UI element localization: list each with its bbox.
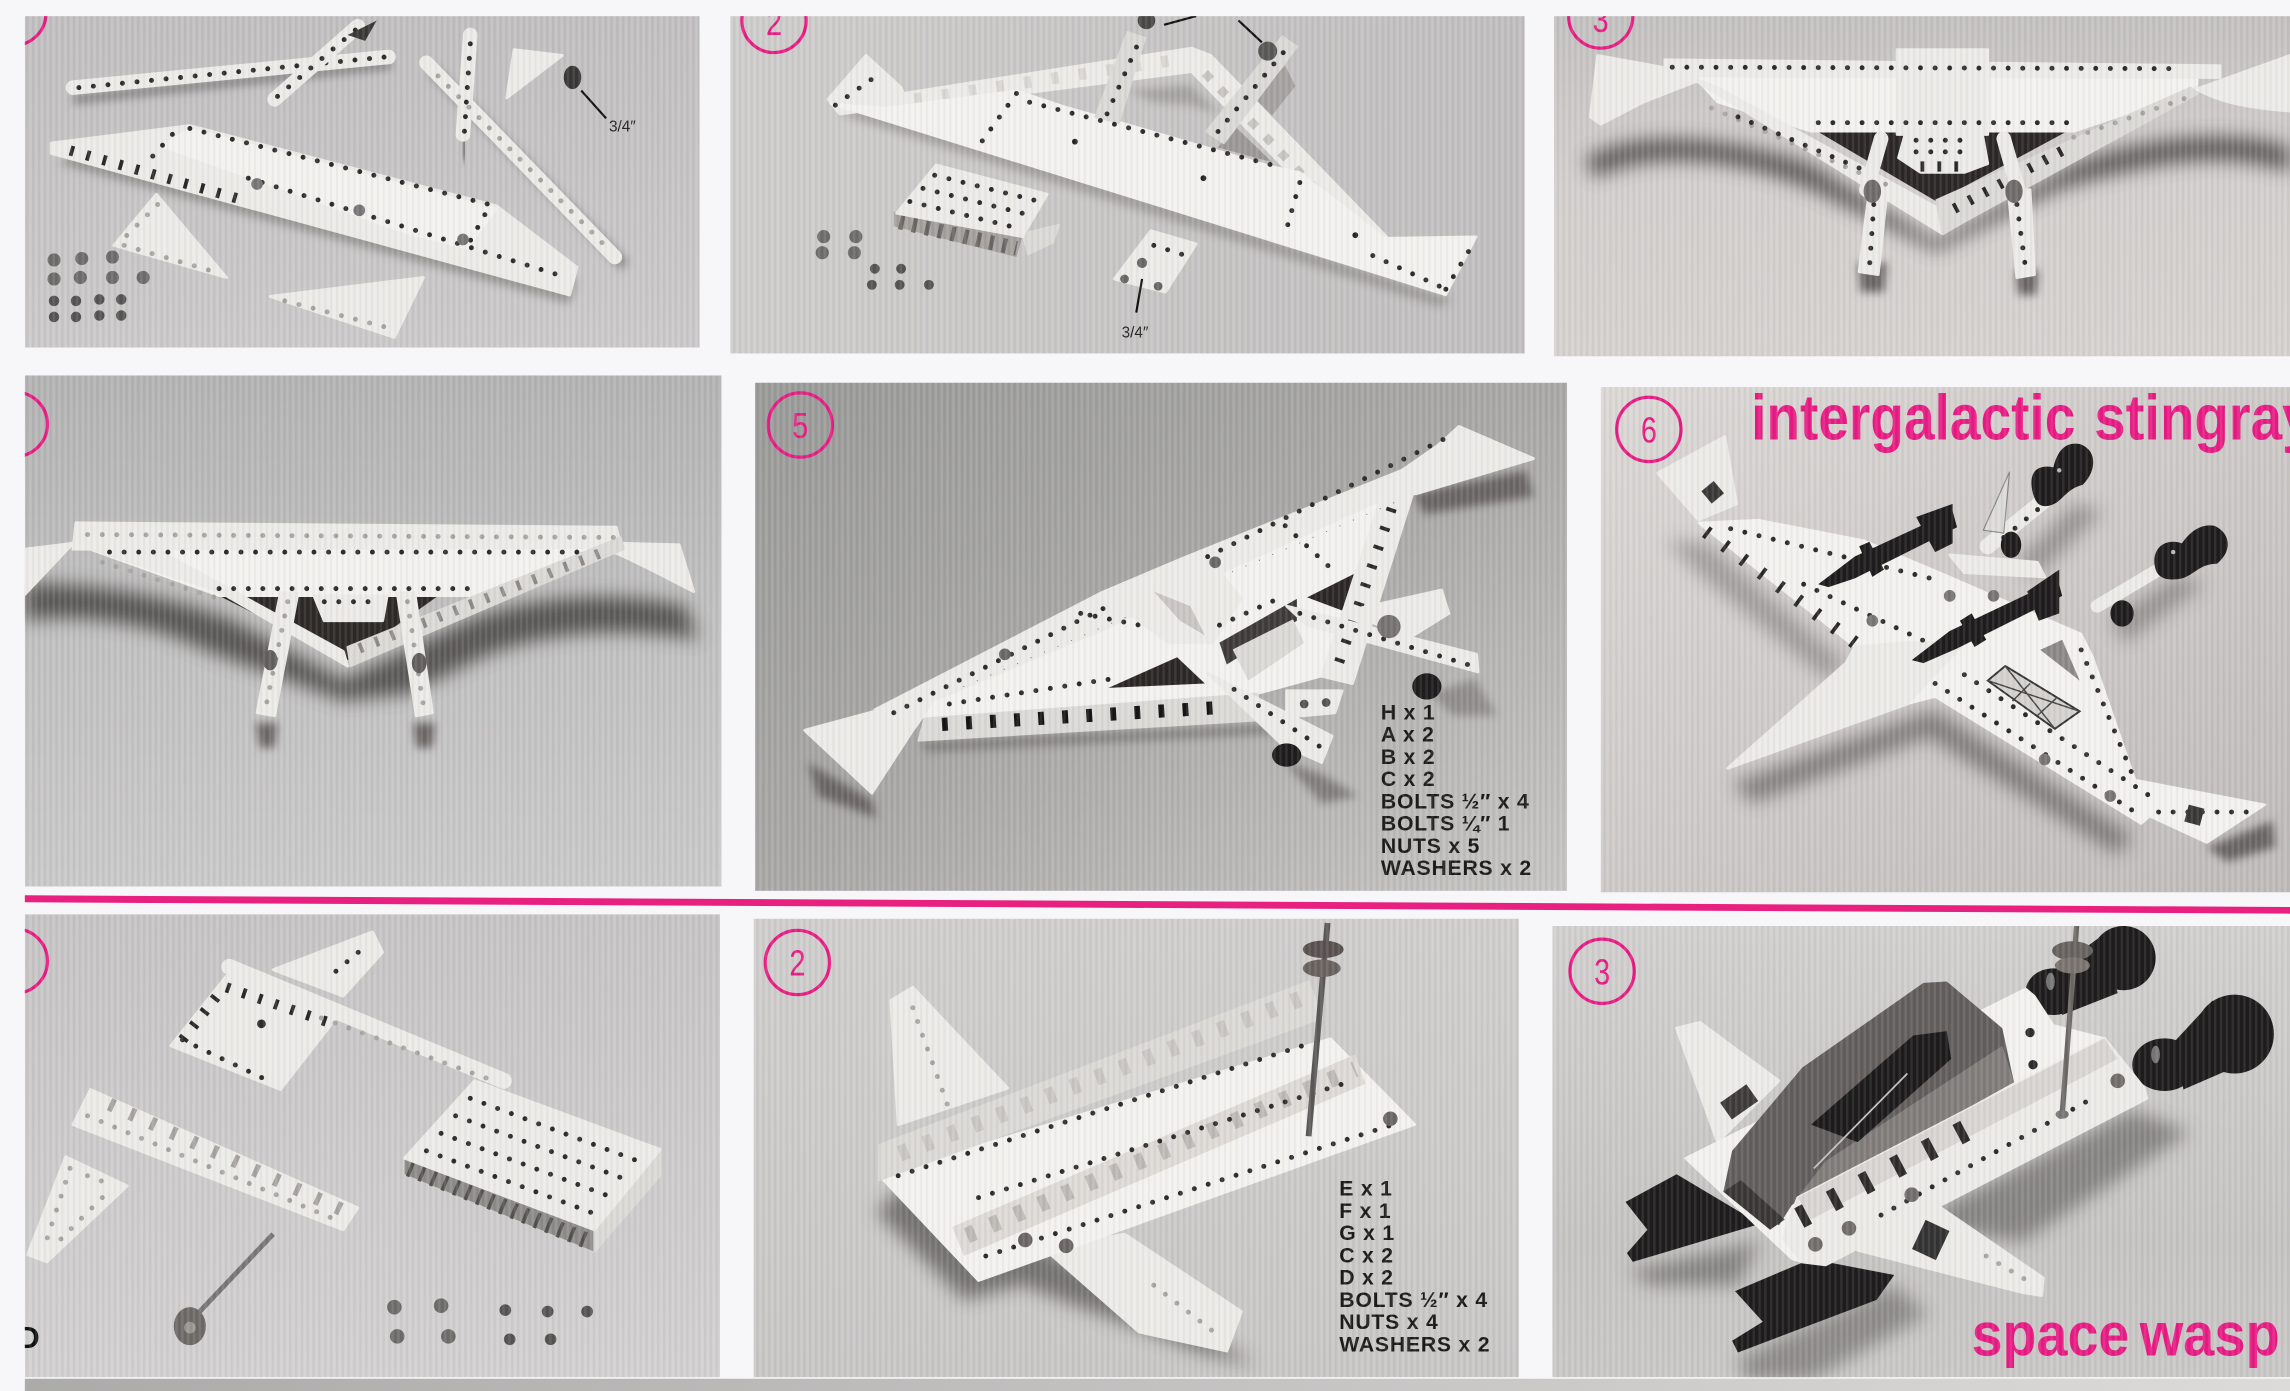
step number 2: [740, 16, 808, 54]
parts list: G x 1: [1339, 1222, 1395, 1245]
title: space wasp: wasp: [2139, 1299, 2280, 1368]
panel: space wasp step 2: [754, 919, 1519, 1377]
parts: long strip with crossing strip: [73, 20, 391, 99]
parts: triangular plates: [114, 50, 562, 337]
parts list: C x 2: [1339, 1244, 1394, 1267]
step number 5: [768, 393, 832, 457]
panel: stingray step 3: [1554, 0, 2290, 356]
model: wing assembly: [828, 12, 1477, 307]
panel: space wasp finished model: [1552, 925, 2290, 1380]
parts: bolts and nuts: [387, 1298, 593, 1345]
model: landing legs: [256, 593, 435, 748]
parts list: NUTS x 5: [1381, 835, 1480, 858]
model: missiles and rocket engines: [1818, 444, 2228, 663]
panel: stingray finished model: [1601, 382, 2290, 892]
scan edge at bottom: [25, 1379, 2290, 1391]
parts list: BOLTS ¼″ 1: [1381, 813, 1510, 836]
part: large flat plate with flange: [51, 126, 577, 304]
parts: bolts and nuts: [816, 230, 934, 290]
panel: stingray step 4: [0, 375, 721, 887]
parts list: H x 1: [1381, 701, 1435, 724]
model: wing assembly three quarter view: [805, 426, 1533, 818]
panel: stingray step 5: [755, 383, 1567, 891]
step number 5: 5: [792, 405, 808, 446]
parts: diagonal strips: [426, 35, 625, 266]
title: intergalactic stingray: intergalactic: [1751, 382, 2075, 454]
model: body and canopy: [1685, 981, 2147, 1265]
part: threaded axle: [174, 1234, 273, 1345]
step number 4: [24, 392, 50, 457]
parts list: [1339, 1177, 1490, 1357]
parts list: WASHERS x 2: [1381, 857, 1532, 880]
parts list: A x 2: [1381, 724, 1435, 747]
title: intergalactic stingray: [1754, 393, 2290, 453]
model: axle with washers: [2052, 925, 2093, 1119]
part: square plate with tail fin: [171, 932, 504, 1090]
parts list: C x 2: [1381, 768, 1435, 791]
parts list: BOLTS ½″ x 4: [1339, 1289, 1488, 1312]
part: triangular plate: [28, 1157, 127, 1262]
model: space wasp with canopy: [1625, 1022, 2191, 1380]
parts list: BOLTS ½″ x 4: [1381, 790, 1530, 813]
panel: stingray step 1: [0, 0, 700, 348]
parts list: E x 1: [1339, 1177, 1393, 1200]
part: channel box: [405, 1081, 660, 1252]
parts list: [1381, 701, 1532, 880]
title: space wasp: space: [1972, 1299, 2129, 1368]
step number 3: 3: [1594, 951, 1610, 992]
step number 3: [1566, 16, 1634, 50]
parts list: B x 2: [1381, 746, 1435, 769]
part: angle strip: [73, 1090, 358, 1230]
shadow of wing: [1585, 136, 2290, 251]
icon: bolt with 3/4 inch pointer: 3/4″: [609, 118, 636, 135]
divider: pink rule: [25, 895, 2290, 914]
parts list: F x 1: [1339, 1200, 1391, 1223]
model: wing front view: [1590, 50, 2290, 234]
parts list: NUTS x 4: [1339, 1311, 1439, 1334]
part: small plate with 3/4 inch bolt: 3/4″: [1122, 324, 1149, 341]
step number 6: [1617, 397, 1681, 462]
parts list: WASHERS x 2: [1339, 1334, 1490, 1357]
panel: stingray step 2: [730, 0, 1525, 353]
step number 1: [24, 16, 48, 46]
parts: bolts and nuts: [47, 250, 150, 322]
part: small plate with 3/4 inch bolt: [1114, 231, 1196, 341]
step number 2: 2: [766, 2, 782, 43]
title: space wasp: [1972, 1299, 2280, 1368]
model: plate with wings and axle: [876, 923, 1415, 1366]
shadow of wing: [25, 584, 698, 701]
part: channel box: [894, 165, 1059, 257]
parts list: D x 2: [1339, 1267, 1394, 1290]
model: rocket engines: [2026, 926, 2274, 1091]
letter mark at edge: D: [18, 1321, 40, 1355]
step number 3: [1570, 939, 1634, 1003]
model: wing from behind: [25, 523, 694, 666]
step number 6: 6: [1641, 410, 1657, 451]
icon: bolt with 3/4 inch pointer: [564, 66, 636, 135]
panel: space wasp step 1: [0, 914, 720, 1377]
step number 1: [0, 929, 47, 993]
step number 2: [765, 930, 830, 995]
model: landing legs: [1858, 139, 2039, 295]
step number 3: 3: [1593, 0, 1609, 40]
step number 2: 2: [789, 943, 805, 984]
model: finished stingray: [1658, 437, 2275, 862]
